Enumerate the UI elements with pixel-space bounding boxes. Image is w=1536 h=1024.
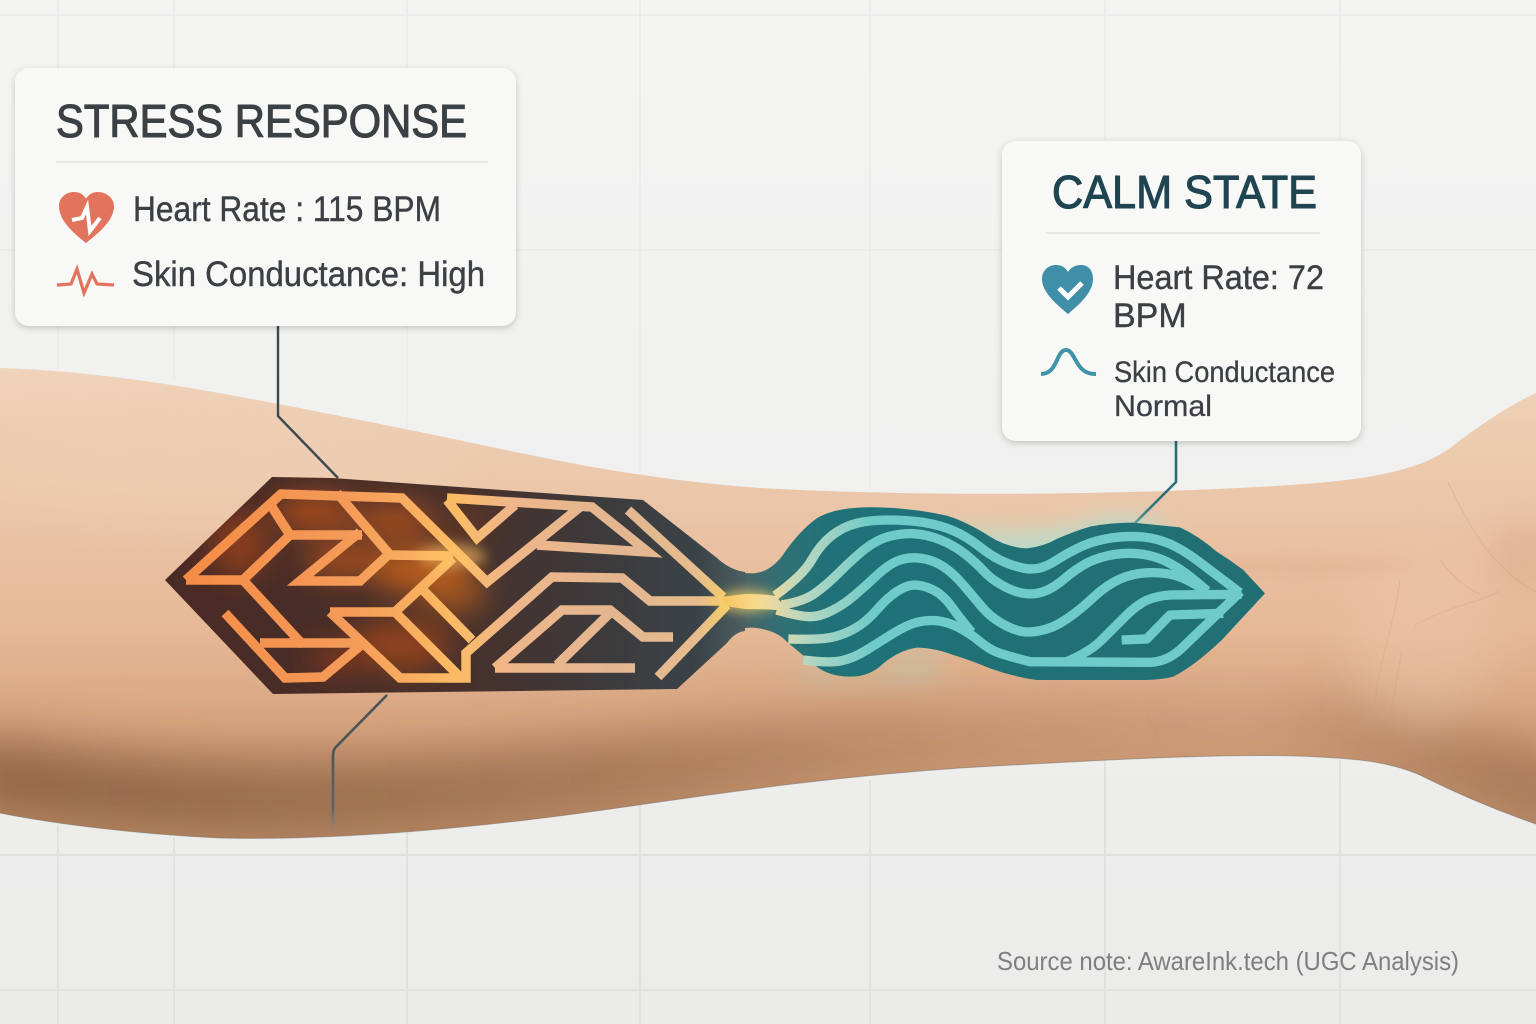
central highlight [418,544,486,568]
orange circuit tattoo: stress side [165,477,745,694]
leader line: patch to lower edge [333,695,387,830]
leader line: stress card to patch [278,326,338,478]
wrist shading [1502,530,1536,574]
forearm [0,368,1536,838]
wave traces [775,520,1242,662]
icon: skin conductance curve [1041,350,1096,374]
patch body [165,477,745,694]
leader line: calm card to patch [1135,441,1176,523]
underside shading [0,724,1536,797]
icon: skin conductance pulse [57,269,114,293]
icon: heart with pulse [59,192,114,243]
glowing orange traces [186,493,727,678]
heading: calm state: CALM STATE [1052,166,1317,218]
metric: skin conductance: Normal [1114,390,1212,423]
teal wave tattoo: calm side [707,507,1265,680]
metric: skin conductance: Skin Conductance [1114,356,1335,389]
heading: stress response: STRESS RESPONSE [56,95,467,147]
metric: skin conductance: Skin Conductance: High [132,255,485,294]
icon: heart with check [1042,265,1093,314]
source note: Source note: AwareInk.tech (UGC Analysis) [997,946,1459,976]
card: stress response [15,68,516,326]
patch body [707,507,1265,680]
card: calm state [1002,141,1361,441]
metric: heart rate: Heart Rate : 115 BPM [133,190,441,229]
metric: heart rate: BPM [1113,297,1187,335]
inner glow [212,494,490,672]
glow around teal patch [790,520,1170,680]
metric: heart rate: Heart Rate: 72 [1113,259,1324,297]
arm underside edge [0,755,1536,838]
neck glow joining the two circuits [718,591,784,611]
